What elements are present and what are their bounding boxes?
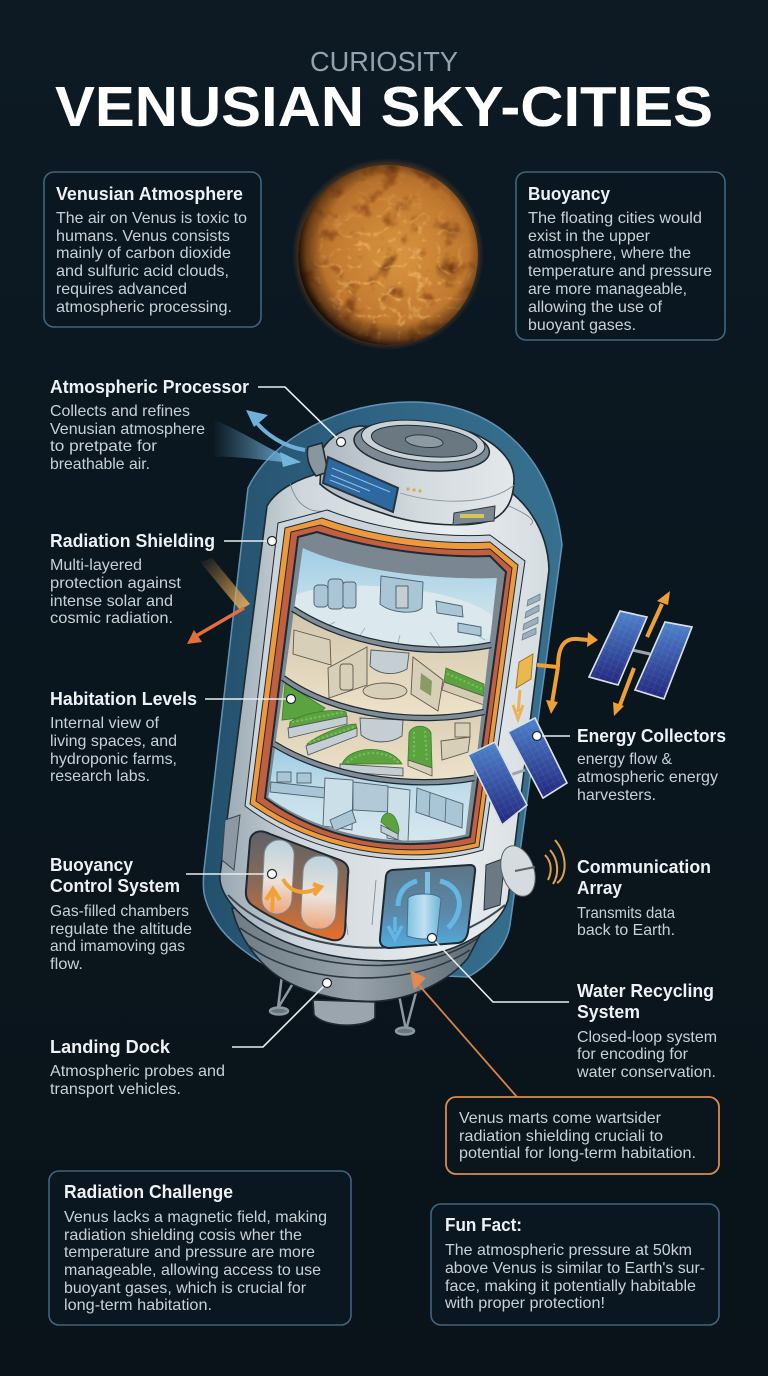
- panel: Venusian Atmosphere: [44, 172, 261, 327]
- dome: [320, 426, 514, 525]
- label: Landing Dock: Atmospheric probes and: [50, 1063, 225, 1080]
- energy conduit box: [513, 654, 533, 719]
- label: Buoyancy Control System: regulate the altitude: [50, 921, 192, 938]
- label: Water Recycling System: for encoding for: [577, 1046, 689, 1063]
- label: Communication Array: Transmits data: [577, 905, 675, 922]
- solar panels upper: [589, 611, 692, 699]
- panel: Radiation Challenge: radiation shielding cosis wher the: [64, 1227, 302, 1244]
- panel: Fun Fact: above Venus is similar to Earth's sur-: [445, 1260, 705, 1277]
- panel: Buoyancy: atmosphere, where the: [528, 245, 691, 262]
- panel: Venusian Atmosphere: humans. Venus consists: [56, 228, 230, 245]
- orange energy flow arrows: [537, 604, 662, 705]
- panel: Venusian Atmosphere: The air on Venus is toxic to: [56, 210, 247, 227]
- label: Radiation Shielding: protection against: [50, 575, 182, 592]
- lower hull: [232, 908, 480, 1001]
- label: Radiation Shielding: intense solar and: [50, 593, 173, 610]
- title: CURIOSITY: [310, 46, 458, 77]
- label: Buoyancy Control System: flow.: [50, 956, 83, 973]
- panel: Fun Fact: [431, 1204, 719, 1325]
- panel: Fun Fact: face, making it potentially habitable: [445, 1278, 696, 1295]
- callout: orange note: potential for long-term habitation.: [459, 1145, 696, 1162]
- title: [55, 46, 713, 139]
- side vents: [522, 594, 540, 640]
- panel: Fun Fact: Fun Fact:: [445, 1215, 522, 1235]
- level 4: research lab: [268, 748, 472, 841]
- panel: Buoyancy: [516, 172, 725, 340]
- panel: Venusian Atmosphere: mainly of carbon dioxide: [56, 245, 231, 262]
- label: Habitation Levels: Habitation Levels: [50, 689, 197, 709]
- label: Buoyancy Control System: [50, 855, 276, 973]
- label: Habitation Levels: Internal view of: [50, 715, 160, 732]
- label: Atmospheric Processor: breathable air.: [50, 456, 150, 473]
- panel: Venusian Atmosphere: and sulfuric acid clouds,: [56, 263, 229, 280]
- label: Water Recycling System: Closed-loop system: [577, 1029, 717, 1046]
- panel: Radiation Challenge: [49, 1171, 351, 1325]
- label: Atmospheric Processor: Collects and refines: [50, 403, 190, 420]
- callout: orange note: radiation shielding cruciali to: [459, 1128, 663, 1145]
- level 3: hydroponic farm: [273, 680, 484, 782]
- label: Atmospheric Processor: Venusian atmosphere: [50, 421, 205, 438]
- label: Buoyancy Control System: Control System: [50, 876, 180, 896]
- label: Landing Dock: [50, 978, 332, 1098]
- level 1: observation deck: [285, 548, 497, 653]
- label: Communication Array: [577, 857, 711, 939]
- panel: Radiation Challenge: long-term habitation.: [64, 1297, 212, 1314]
- water recycling chamber: [380, 865, 475, 948]
- label: Habitation Levels: [50, 689, 296, 785]
- label: Water Recycling System: System: [577, 1002, 640, 1022]
- panel: Venusian Atmosphere: atmospheric processing.: [56, 299, 232, 316]
- main body: [220, 472, 549, 961]
- access panel: [453, 506, 495, 525]
- label: Radiation Shielding: Multi-layered: [50, 557, 142, 574]
- level 2: living quarters: [280, 612, 490, 717]
- display screen: [323, 457, 398, 512]
- communication dish: [484, 840, 565, 910]
- label: Energy Collectors: energy flow &: [577, 751, 672, 768]
- label: Landing Dock: transport vehicles.: [50, 1081, 181, 1098]
- landing legs: [270, 975, 418, 1034]
- translucent outer shell: [203, 402, 562, 977]
- label: Landing Dock: Landing Dock: [50, 1037, 171, 1057]
- label: Energy Collectors: [532, 726, 726, 804]
- panel: Buoyancy: The floating cities would: [528, 210, 702, 227]
- label: Communication Array: Communication: [577, 857, 711, 877]
- panel: Radiation Challenge: Venus lacks a magnetic field, making: [64, 1209, 327, 1226]
- panel: Fun Fact: The atmospheric pressure at 50km: [445, 1242, 692, 1259]
- label: Radiation Shielding: [50, 531, 276, 627]
- label: Habitation Levels: research labs.: [50, 768, 150, 785]
- label: Energy Collectors: Energy Collectors: [577, 726, 726, 746]
- label: Water Recycling System: [428, 934, 717, 1081]
- body lower ring: [228, 895, 505, 948]
- radiation shield layers: [245, 510, 525, 860]
- habitation levels: [268, 548, 500, 842]
- dome top ring: [352, 414, 492, 477]
- planet Venus: [292, 158, 484, 350]
- panel: Radiation Challenge: temperature and pressure are more: [64, 1244, 315, 1261]
- panel: Radiation Challenge: Radiation Challenge: [64, 1182, 233, 1202]
- body seam lines: [290, 483, 533, 935]
- label: Energy Collectors: atmospheric energy: [577, 769, 718, 786]
- panel: Buoyancy: allowing the use of: [528, 299, 663, 316]
- panel: Fun Fact: with proper protection!: [444, 1295, 605, 1312]
- callout arrow: [410, 970, 517, 1097]
- label: Buoyancy Control System: and imamoving gas: [50, 938, 185, 955]
- panel: Venusian Atmosphere: requires advanced: [56, 281, 187, 298]
- label: Communication Array: Array: [577, 878, 622, 898]
- label: Buoyancy Control System: Buoyancy: [50, 855, 133, 875]
- label: Communication Array: back to Earth.: [577, 922, 675, 939]
- title: VENUSIAN SKY-CITIES: [55, 75, 713, 139]
- panel: Buoyancy: buoyant gases.: [528, 317, 636, 334]
- label: Habitation Levels: hydroponic farms,: [50, 751, 177, 768]
- floor bands: [274, 609, 491, 782]
- label: Atmospheric Processor: [50, 377, 346, 473]
- panel: Buoyancy: temperature and pressure: [528, 263, 712, 280]
- label: Atmospheric Processor: Atmospheric Processor: [50, 377, 249, 397]
- side service panel: [222, 815, 240, 870]
- landing nozzle: [313, 1000, 375, 1025]
- callout: orange note: Venus marts come wartsider: [459, 1110, 662, 1127]
- label: Buoyancy Control System: Gas-filled chambers: [50, 903, 189, 920]
- label: Radiation Shielding: cosmic radiation.: [50, 610, 173, 627]
- panel: Venusian Atmosphere: Venusian Atmosphere: [56, 184, 243, 204]
- label: Atmospheric Processor: to pretpate for: [50, 438, 158, 455]
- panel: Buoyancy: Buoyancy: [528, 184, 610, 204]
- radiation arrow: [187, 558, 250, 644]
- callout: orange note: [446, 1097, 719, 1174]
- buoyancy chambers: [246, 831, 348, 940]
- label: Radiation Shielding: Radiation Shielding: [50, 531, 215, 551]
- label: Water Recycling System: Water Recycling: [577, 981, 714, 1001]
- status lights: [406, 487, 422, 493]
- panel: Radiation Challenge: manageable, allowing access to use: [64, 1262, 321, 1279]
- intake cylinder: [307, 443, 328, 476]
- label: Water Recycling System: water conservation.: [576, 1064, 716, 1081]
- panel: Buoyancy: exist in the upper: [528, 228, 651, 245]
- panel: Radiation Challenge: buoyant gases, which is crucial for: [64, 1280, 307, 1297]
- panel: Buoyancy: are more manageable,: [528, 281, 687, 298]
- label: Habitation Levels: living spaces, and: [50, 733, 177, 750]
- atmospheric flow arrows: [213, 410, 305, 467]
- solar panels lower: [468, 718, 567, 825]
- label: Energy Collectors: harvesters.: [577, 787, 656, 804]
- sky-city illustration: [203, 402, 692, 1034]
